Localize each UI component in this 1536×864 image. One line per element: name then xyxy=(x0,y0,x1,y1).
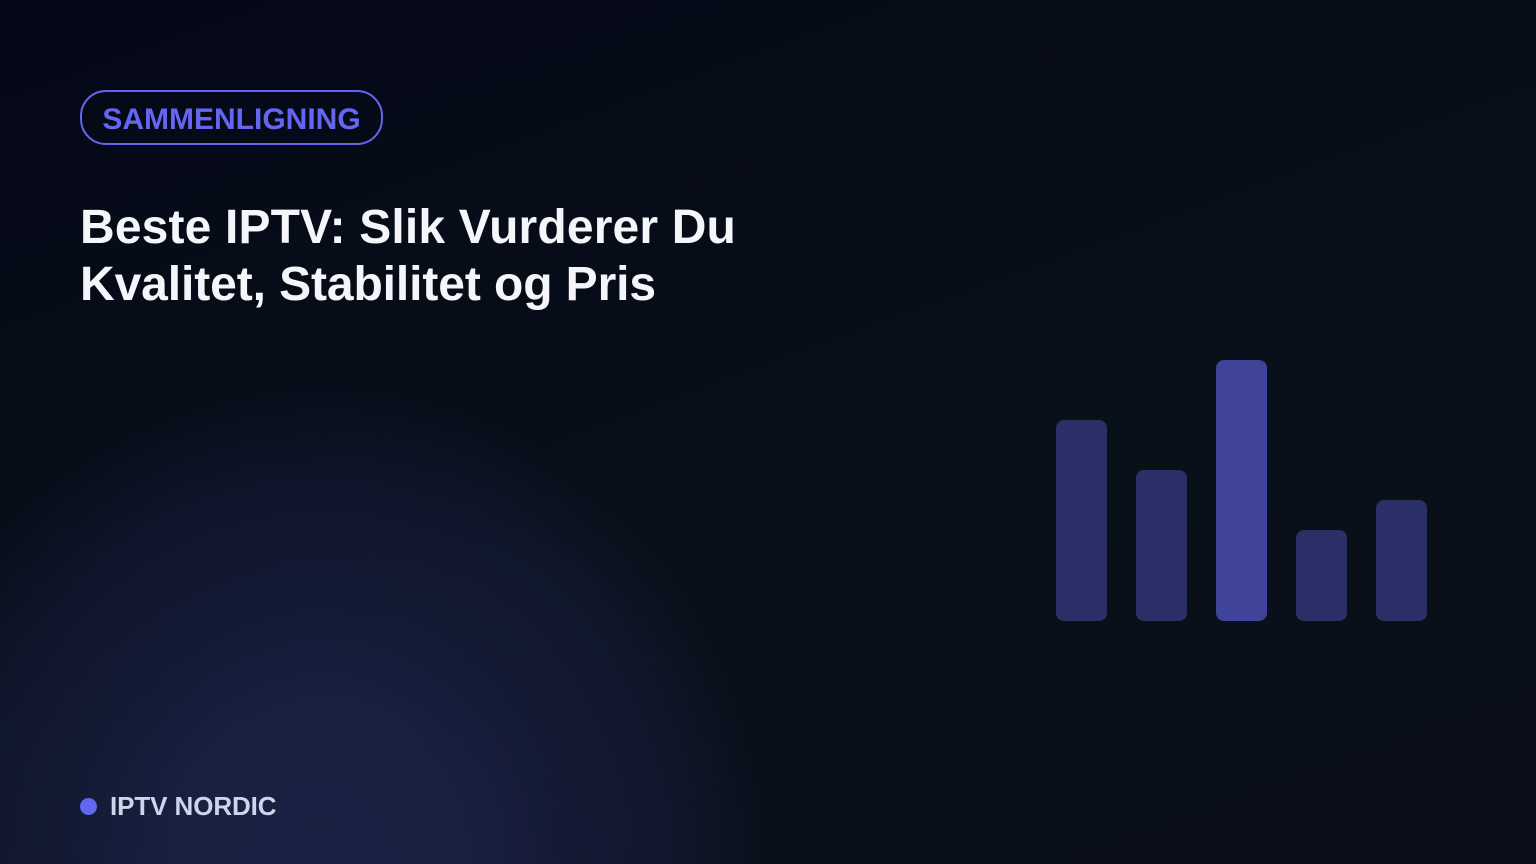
title: Beste IPTV: Slik Vurderer Du xyxy=(80,201,736,254)
bar chart xyxy=(1056,360,1427,621)
badge: SAMMENLIGNING: SAMMENLIGNING xyxy=(102,103,361,136)
bar 5 xyxy=(1376,500,1427,621)
badge: SAMMENLIGNING xyxy=(80,90,383,145)
title: Kvalitet, Stabilitet og Pris xyxy=(80,258,656,311)
brand footer xyxy=(80,791,276,821)
bar 4 xyxy=(1296,530,1347,621)
icon: brand dot xyxy=(80,798,97,815)
bar 3: highlighted xyxy=(1216,360,1267,621)
brand name: IPTV NORDIC xyxy=(110,791,276,821)
bar 2 xyxy=(1136,470,1187,621)
title xyxy=(80,201,736,311)
bar 1 xyxy=(1056,420,1107,621)
